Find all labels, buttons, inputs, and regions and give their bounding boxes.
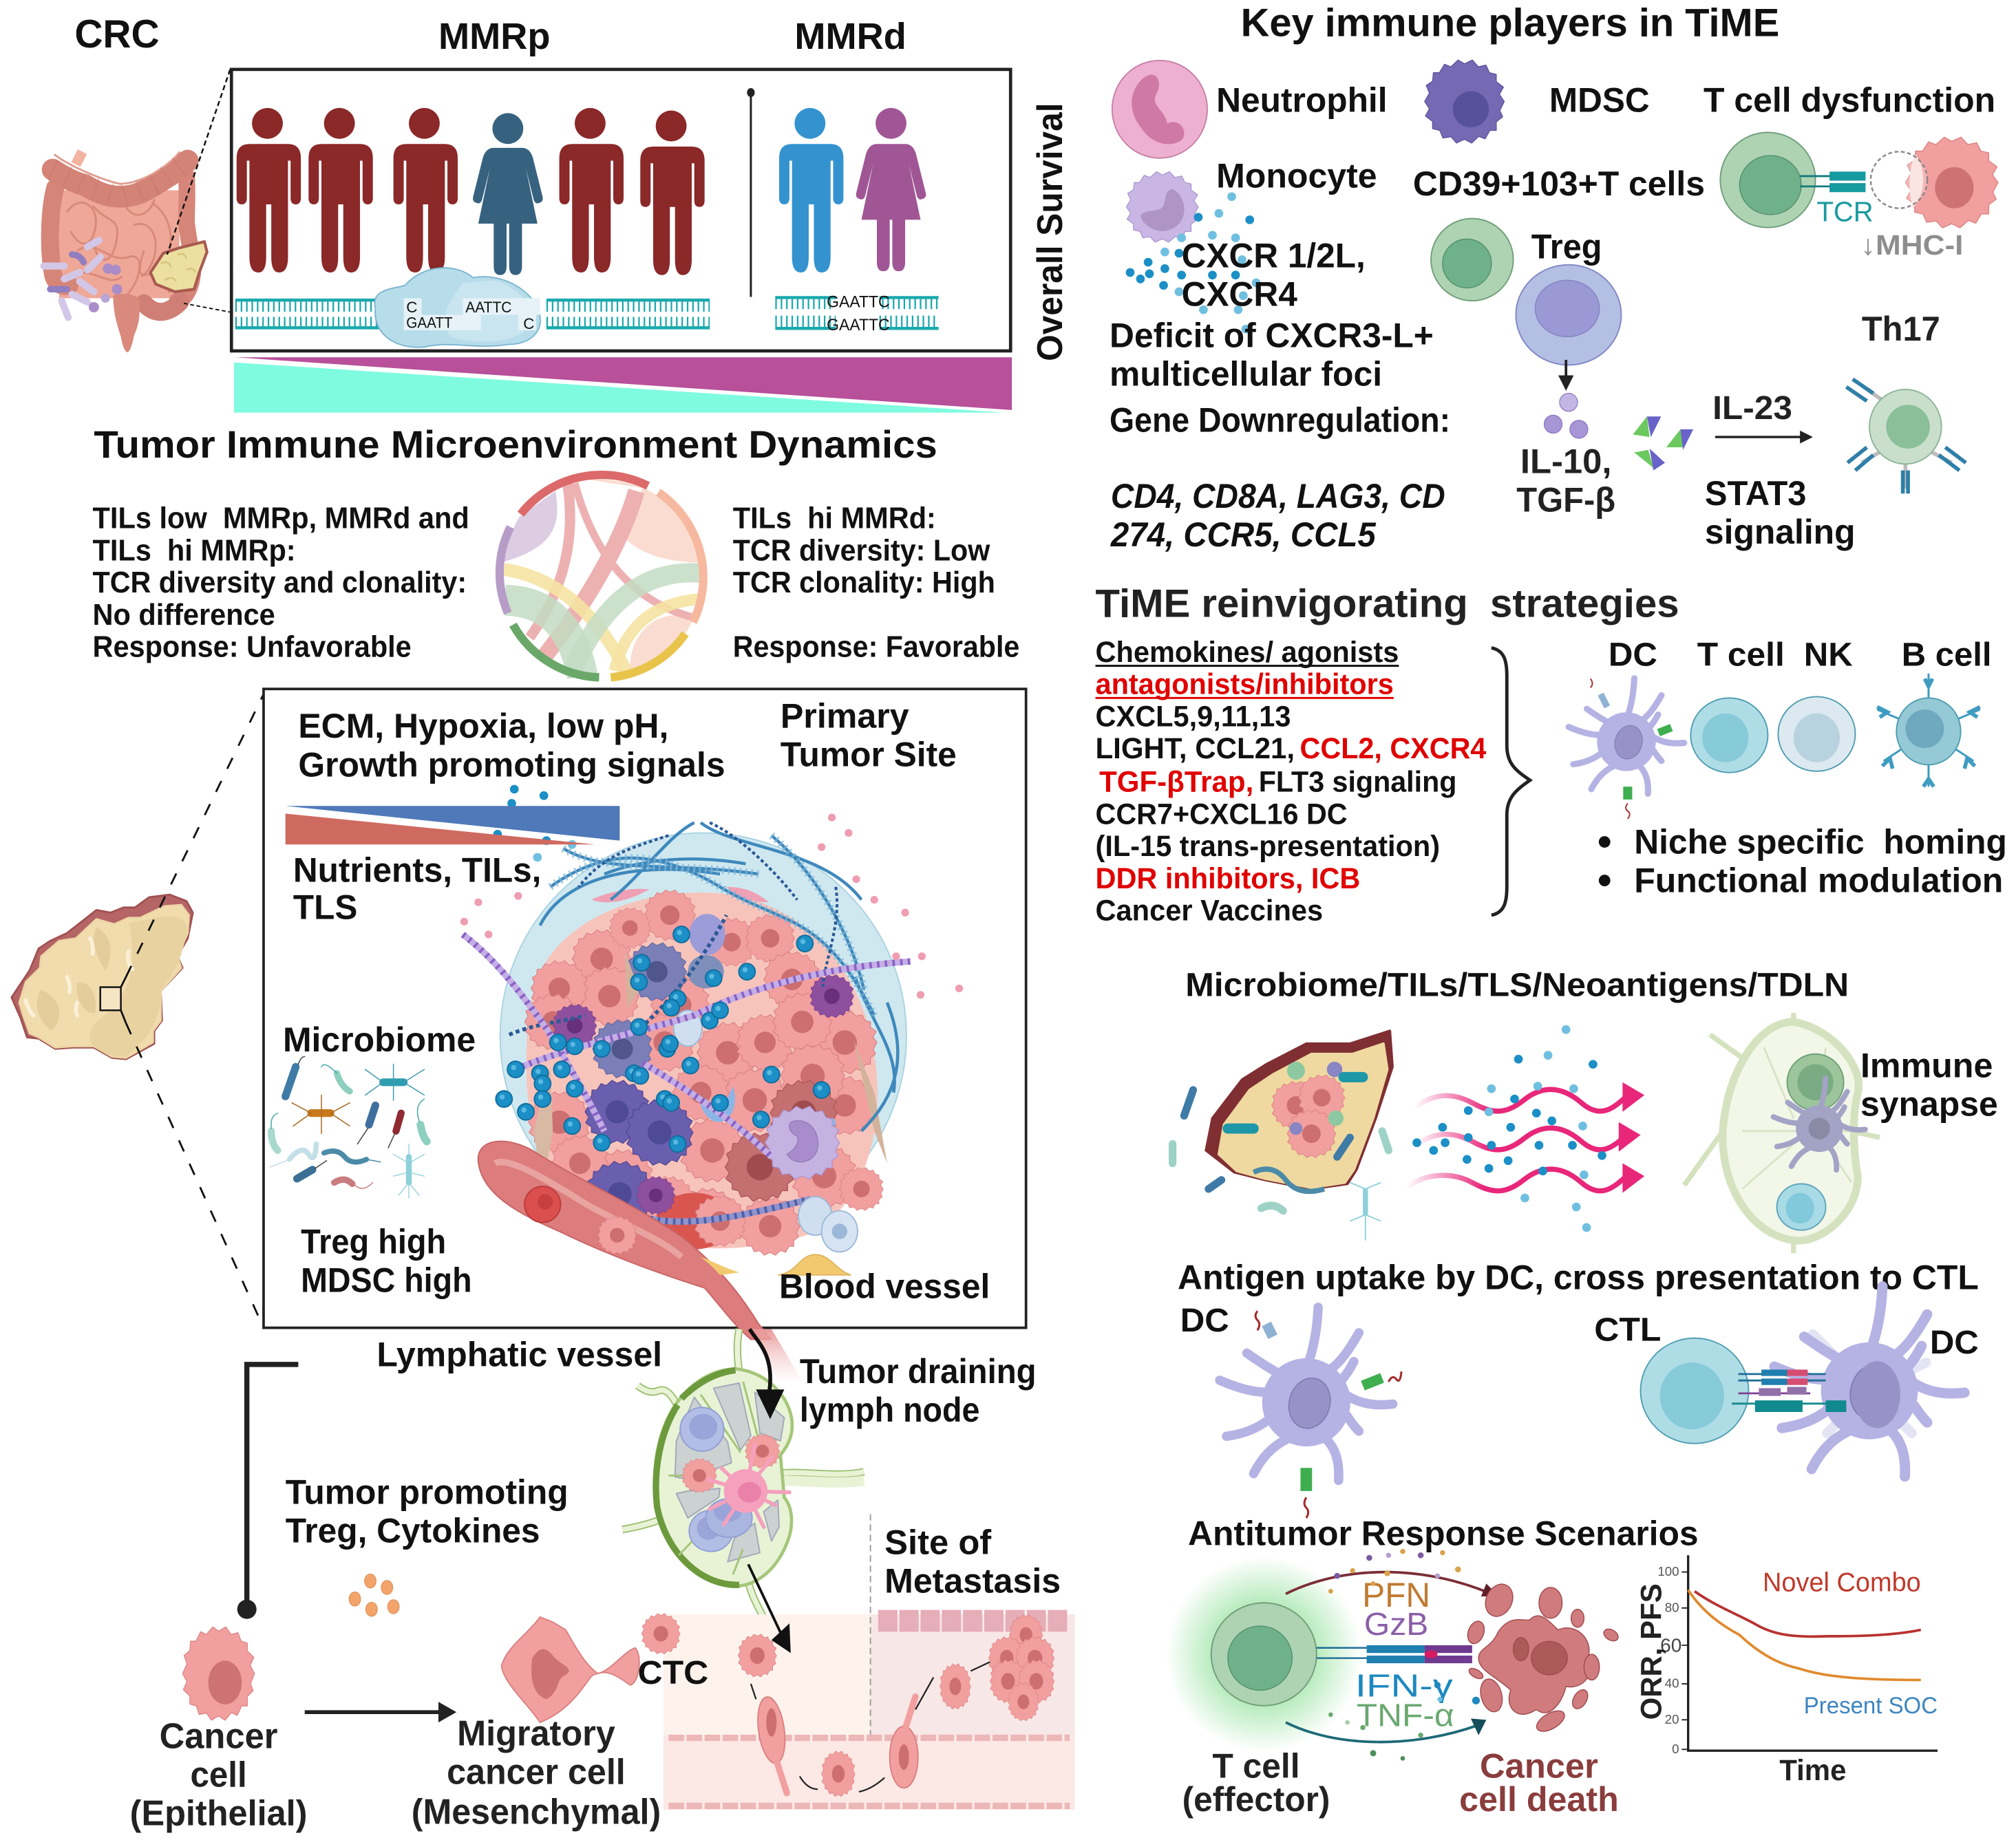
text: strategies list: FLT3 signaling bbox=[1259, 766, 1456, 799]
icon: tumor draining lymph node bbox=[622, 1329, 864, 1621]
metastatic cluster bbox=[988, 1615, 1054, 1721]
icon: colon with tumor bbox=[44, 151, 207, 352]
tumor ball background bbox=[500, 833, 906, 1239]
text: strategies list: antagonists/inhibitors bbox=[1096, 668, 1394, 701]
text block: TILs hi bbox=[733, 502, 1019, 664]
text: CTC: CTC bbox=[638, 1654, 708, 1691]
label: Treg: Treg bbox=[1531, 226, 1602, 266]
text: Site of Metastasis: Metastasis bbox=[884, 1561, 1061, 1600]
text: ECM, Hypoxia: ECM, Hypoxia, low pH, bbox=[298, 706, 668, 745]
label: CD39+103+T cells: CD39+103+T cells bbox=[1413, 164, 1705, 203]
icon: TGF-beta particles bbox=[1633, 416, 1693, 471]
text block: TILs low: TILs low MMRp, MMRd and bbox=[93, 502, 469, 535]
text: Tumor promoting bbox=[286, 1473, 569, 1550]
text: ECM, Hypoxia bbox=[298, 706, 725, 784]
bullets bbox=[1599, 822, 2007, 899]
label: IL-10 TGF-β: IL-10, bbox=[1520, 441, 1612, 480]
heading: Antigen uptake: Antigen uptake by DC, cross presentation to CTL bbox=[1178, 1258, 1979, 1297]
text: Lymphatic vessel: Lymphatic vessel bbox=[376, 1335, 662, 1374]
label: STAT3 signaling: STAT3 bbox=[1705, 473, 1807, 513]
text: Nutrients, TILs, TLS bbox=[293, 850, 541, 927]
label: Immune synapse: synapse bbox=[1860, 1084, 1998, 1123]
text: Migratory cancer cell: Migratory bbox=[457, 1714, 615, 1754]
text: gene list bbox=[1110, 476, 1445, 554]
heading: Tumor Immune Microenvironment Dynamics: Tumor Immune Microenvironment Dynamics bbox=[94, 422, 937, 466]
divider pin bbox=[747, 88, 755, 297]
text: Treg high, MDSC high: MDSC high bbox=[301, 1260, 472, 1299]
chemokine dots bbox=[1126, 192, 1260, 334]
text: strategies list: DDR inhibitors, ICB bbox=[1096, 862, 1360, 895]
text: Primary Tumor Site bbox=[781, 696, 957, 773]
text: Gene Downregulation: Gene Downregulation: bbox=[1110, 400, 1450, 440]
text: Site of Metastasis bbox=[884, 1522, 1061, 1600]
secreted factors: blue dots bbox=[460, 785, 963, 1152]
label: Cancer cell death: cell death bbox=[1459, 1779, 1619, 1819]
icon: DC-CTL cross presentation bbox=[1641, 1286, 1964, 1477]
label: T cell effector: (effector) bbox=[1182, 1779, 1330, 1819]
arrow: IL-23 bbox=[1715, 431, 1813, 443]
panel: survival box: C bbox=[406, 299, 417, 316]
heading: Antitumor Response Scenarios: Antitumor Response Scenarios bbox=[1188, 1513, 1699, 1552]
icon: migratory cell bbox=[502, 1617, 639, 1722]
panel: survival box bbox=[231, 69, 1010, 351]
icon: B cell bbox=[1877, 674, 1980, 787]
arrow: node to site bbox=[748, 1564, 791, 1653]
icons: microbiome bacteria bbox=[270, 1056, 427, 1198]
label: CTL: CTL bbox=[1594, 1311, 1661, 1348]
icon: activated Treg cell bbox=[1516, 265, 1622, 365]
chart: ORR PFS line chart: 40 bbox=[1665, 1676, 1679, 1691]
text: Primary Tumor Site: Tumor Site bbox=[781, 734, 957, 773]
zoom lines from colon to box bbox=[167, 69, 231, 312]
label: DC T cell NK B cell bbox=[1609, 636, 1991, 674]
text: strategies list: LIGHT, CCL21, bbox=[1096, 732, 1295, 765]
icon: enlarged tumor bbox=[12, 895, 193, 1059]
icon: T cell bbox=[1690, 698, 1768, 773]
icon: migrating signals bbox=[1407, 1025, 1644, 1232]
chart: ORR PFS line chart: Present SOC bbox=[1804, 1693, 1938, 1719]
label: DC T cell NK B cell: T cell bbox=[1697, 636, 1785, 674]
text: strategies list: CCL2, CXCR4 bbox=[1300, 732, 1486, 765]
bullets: Niche specific homing bbox=[1634, 822, 2007, 861]
axis label: ORR, PFS: ORR, PFS bbox=[1635, 1583, 1668, 1720]
chart: ORR PFS line chart: 20 bbox=[1665, 1712, 1679, 1726]
arrow: vessel to lymph node bbox=[750, 1329, 784, 1419]
icon: circulating tumor cell bbox=[641, 1614, 680, 1654]
tumor cell mass bbox=[524, 887, 887, 1255]
icon: neutrophil bbox=[1112, 61, 1207, 158]
synapse receptor bbox=[1317, 1648, 1472, 1660]
chart: chord diagram bbox=[500, 475, 703, 677]
text: IFN TNF bbox=[1355, 1668, 1454, 1733]
neutrophil in tumor bbox=[765, 1106, 840, 1179]
bullets: Functional modulation bbox=[1634, 860, 2003, 899]
label: Immune synapse: Immune bbox=[1860, 1045, 1993, 1084]
icon: tumor sample square bbox=[100, 987, 121, 1010]
icon: MDSC bbox=[1425, 60, 1505, 143]
label: T cell dysfunction: T cell dysfunction bbox=[1704, 81, 1995, 120]
text: strategies list: (IL-15 trans-presentation) bbox=[1096, 830, 1440, 863]
vessel tail outside box bbox=[751, 1329, 803, 1383]
text block: TILs hi: Response: Favorable bbox=[733, 630, 1019, 664]
icons: MMRd patients bbox=[779, 108, 926, 272]
text: strategies list: CCR7+CXCL16 DC bbox=[1096, 798, 1348, 831]
text: Deficit: multicellular foci bbox=[1110, 354, 1382, 393]
chart: ORR PFS line chart: 80 bbox=[1665, 1600, 1679, 1614]
text: Tumor draining lymph node bbox=[800, 1351, 1037, 1429]
chart: ORR PFS line chart: Time bbox=[1779, 1754, 1846, 1787]
icon: IL-10 particles bbox=[1544, 394, 1588, 438]
heading: TiME reinvigorating strategies: TiME reinvigorating strategies bbox=[1096, 582, 1679, 626]
brace bbox=[1492, 648, 1530, 915]
heading: Microbiome/TILs: Microbiome/TILs/TLS/Neoantigens/TDLN bbox=[1185, 967, 1849, 1004]
icon: dying cancer cell bbox=[1465, 1580, 1620, 1735]
text: Nutrients, TILs, TLS: TLS bbox=[293, 888, 357, 927]
label: IL-10 TGF-β bbox=[1516, 441, 1615, 519]
icon: epithelial cancer cell bbox=[182, 1627, 255, 1720]
panel: survival box: GAATT bbox=[406, 314, 453, 331]
chart: ORR PFS line chart: 100 bbox=[1657, 1564, 1679, 1579]
text: Deficit bbox=[1110, 315, 1434, 393]
panel: survival box: AATTC bbox=[465, 299, 511, 316]
label: CXCR bbox=[1182, 236, 1366, 314]
text: Migratory cancer cell: (Mesenchymal) bbox=[412, 1793, 661, 1832]
text: ECM, Hypoxia: Growth promoting signals bbox=[298, 745, 725, 784]
label: DC T cell NK B cell: NK bbox=[1804, 636, 1853, 674]
text: Cancer cell (Epithelial): cell bbox=[190, 1755, 247, 1795]
text: strategies list: TGF-βTrap, bbox=[1099, 766, 1253, 799]
icon: dendritic cell bbox=[1569, 678, 1684, 819]
arrows: T cell to cancer bbox=[1286, 1572, 1499, 1742]
label: Overall Survival: Overall Survival bbox=[1030, 103, 1070, 361]
text: PFN GzB bbox=[1362, 1575, 1430, 1642]
icon: cytokines bbox=[349, 1574, 399, 1616]
metastatic cells bbox=[738, 1634, 970, 1797]
label: DC T cell NK B cell: DC bbox=[1609, 636, 1657, 674]
label: IL-23: IL-23 bbox=[1712, 389, 1792, 427]
text block: TILs low: Response: Unfavorable bbox=[93, 630, 412, 664]
text: strategies list: Cancer Vaccines bbox=[1096, 894, 1323, 927]
heading: MMRp: MMRp bbox=[438, 16, 551, 57]
heading: Key immune players: Key immune players in TiME bbox=[1241, 1, 1779, 45]
heading: MMRd: MMRd bbox=[794, 16, 906, 57]
text block: TILs low: No difference bbox=[93, 598, 275, 632]
label: T cell effector bbox=[1182, 1746, 1330, 1819]
cytotoxic granules bbox=[1328, 1549, 1480, 1761]
text: gene list: CD4, CD8A, LAG3, CD bbox=[1111, 476, 1445, 515]
icon: T cell dysfunction bbox=[1720, 132, 1998, 228]
label: Cancer cell death bbox=[1459, 1746, 1619, 1819]
text: Cancer cell (Epithelial): Cancer bbox=[160, 1716, 277, 1756]
heading: CRC: CRC bbox=[74, 12, 160, 56]
inhibition line bbox=[237, 1365, 298, 1619]
icon: immune synapse lymph node bbox=[1684, 1013, 1880, 1253]
blood vessel bbox=[478, 1142, 772, 1339]
text: Migratory cancer cell: cancer cell bbox=[447, 1753, 626, 1793]
text: Blood vessel: Blood vessel bbox=[779, 1267, 990, 1306]
text: strategies list bbox=[1096, 636, 1486, 927]
text: Nutrients, TILs, TLS: Nutrients, TILs, bbox=[293, 850, 541, 889]
icon: monocyte bbox=[1126, 171, 1198, 242]
text block: TILs low bbox=[93, 502, 469, 664]
label: Immune synapse bbox=[1860, 1045, 1998, 1123]
text: Tumor draining lymph node: lymph node bbox=[800, 1390, 979, 1429]
icon: microbiome tumor bbox=[1173, 1031, 1392, 1241]
text: Microbiome: Microbiome bbox=[283, 1020, 476, 1059]
text: gene list: 274, CCR5, CCL5 bbox=[1110, 515, 1377, 554]
gradient wedges: nutrients bbox=[286, 806, 619, 844]
extracellular fibers bbox=[463, 823, 911, 1221]
text: Deficit: Deficit of CXCR3-L+ bbox=[1110, 315, 1434, 354]
enzyme blob bbox=[374, 268, 540, 347]
label: Cancer cell death: Cancer bbox=[1480, 1746, 1598, 1785]
small arrows of migration bbox=[751, 1662, 990, 1792]
label: Monocyte: Monocyte bbox=[1216, 156, 1377, 195]
label: CXCR: CXCR4 bbox=[1182, 275, 1297, 314]
icon: NK cell bbox=[1778, 696, 1855, 771]
label: TCR: TCR bbox=[1816, 195, 1874, 227]
label: STAT3 signaling bbox=[1705, 473, 1855, 551]
label: DC left: DC bbox=[1180, 1302, 1229, 1339]
text: IFN TNF: IFN-γ bbox=[1355, 1668, 1454, 1704]
zoom lines: tumor to primary site bbox=[121, 694, 264, 1328]
icon: Treg bbox=[1431, 219, 1514, 301]
text: Primary Tumor Site: Primary bbox=[781, 696, 909, 735]
text: Migratory cancer cell bbox=[412, 1714, 661, 1832]
text: Treg high, MDSC high bbox=[301, 1221, 472, 1299]
text: Tumor draining lymph node: Tumor draining bbox=[800, 1351, 1037, 1391]
cells below tumor bbox=[701, 1197, 858, 1275]
label: CXCR: CXCR 1/2L, bbox=[1182, 236, 1366, 275]
text block: TILs low: TCR diversity and clonality: bbox=[93, 566, 467, 599]
label: Neutrophil: Neutrophil bbox=[1216, 81, 1388, 120]
chart: ORR PFS line chart bbox=[1657, 1555, 1938, 1787]
icon: antigen uptake DC bbox=[1220, 1307, 1401, 1518]
text: Tumor promoting: Treg, Cytokines bbox=[286, 1511, 540, 1550]
panel: primary tumor site bbox=[264, 689, 1026, 1339]
survival gradient wedges bbox=[234, 357, 1012, 413]
icon: Th17 cell bbox=[1846, 379, 1966, 493]
text: Site of Metastasis: Site of bbox=[884, 1522, 991, 1561]
text: PFN GzB: GzB bbox=[1364, 1606, 1428, 1642]
arrow: EMT bbox=[305, 1702, 456, 1722]
text block: TILs hi: TCR clonality: High bbox=[733, 566, 995, 599]
label: IL-10 TGF-β: TGF-β bbox=[1516, 480, 1615, 519]
panel: metastasis backgrounds bbox=[664, 1514, 1075, 1810]
text: Cancer cell (Epithelial): (Epithelial) bbox=[130, 1794, 307, 1834]
label: STAT3 signaling: signaling bbox=[1705, 512, 1855, 551]
label: Th17: Th17 bbox=[1862, 309, 1940, 348]
label: T cell effector: T cell bbox=[1213, 1746, 1300, 1785]
text block: TILs low: TILs hi MMRp: bbox=[93, 533, 296, 567]
chart: ORR PFS line chart: 0 bbox=[1672, 1742, 1679, 1756]
DNA strands bbox=[235, 297, 939, 328]
text block: TILs hi: TCR diversity: Low bbox=[733, 533, 990, 567]
label: MHC-I: ↓MHC-I bbox=[1860, 229, 1963, 261]
lymphatic vessels bbox=[622, 1329, 864, 1621]
panel: survival box: C bbox=[523, 315, 534, 332]
text: strategies list: Chemokines/ agonists bbox=[1096, 636, 1399, 669]
text: Treg high, MDSC high: Treg high bbox=[301, 1221, 446, 1261]
panel: survival box: GAATTC bbox=[827, 292, 890, 311]
arrow: Treg to cytokines bbox=[1558, 360, 1573, 391]
text: strategies list: CXCL5,9,11,13 bbox=[1096, 700, 1291, 733]
text block: TILs hi: TILs hi MMRd: bbox=[733, 502, 936, 535]
label: MDSC: MDSC bbox=[1549, 81, 1650, 120]
text: PFN GzB: PFN bbox=[1362, 1575, 1430, 1614]
label: DC right: DC bbox=[1930, 1324, 1979, 1361]
chart: ORR PFS line chart: Novel Combo bbox=[1763, 1568, 1921, 1598]
icon: effector T cell bbox=[1166, 1556, 1361, 1752]
icons: MMRp patients bbox=[237, 108, 705, 275]
chart: ORR PFS line chart: 60 bbox=[1660, 1634, 1681, 1656]
text: Cancer cell (Epithelial) bbox=[130, 1716, 307, 1834]
label: DC T cell NK B cell: B cell bbox=[1902, 636, 1991, 674]
text: Tumor promoting: Tumor promoting bbox=[286, 1473, 569, 1512]
panel: survival box: GAATTC bbox=[827, 316, 890, 334]
text: IFN TNF: TNF-α bbox=[1357, 1698, 1454, 1733]
